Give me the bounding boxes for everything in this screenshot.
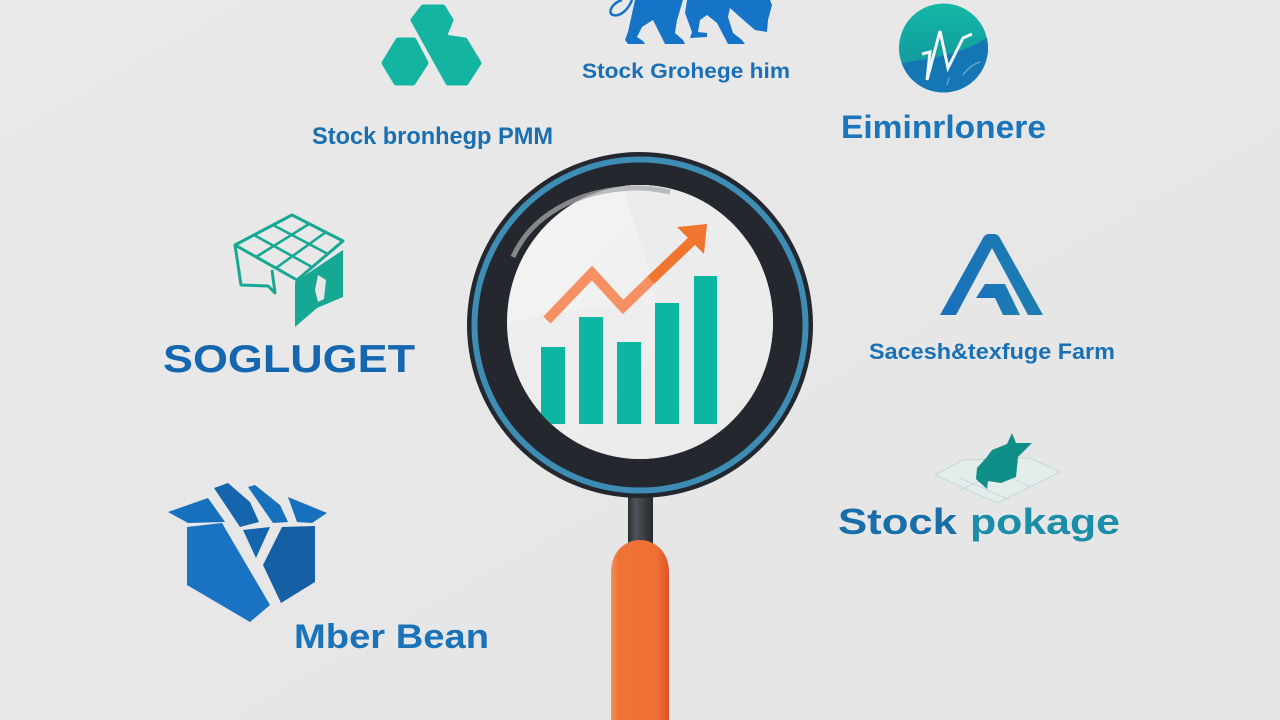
magnifier lens — [507, 185, 780, 470]
magnifier neck — [628, 490, 653, 545]
magnifier orange handle — [611, 540, 669, 720]
label: Sacesh & texfuge Farm: Sacesh&texfuge Farm — [869, 339, 1115, 364]
bar chart — [541, 276, 717, 424]
magnifier rim — [467, 152, 813, 498]
label: Stock bronhegp PMM: Stock bronhegp PMM — [312, 123, 553, 150]
label: Eiminrlonere: Eiminrlonere — [841, 109, 1046, 145]
label: Stock pokage — [838, 501, 1120, 542]
orange trend arrow — [547, 224, 707, 320]
icon: map on a tilted plane — [935, 433, 1060, 503]
icon: letter A logo — [940, 234, 1043, 315]
label: Mber Bean: Mber Bean — [294, 618, 489, 656]
infographic canvas — [164, 0, 1118, 720]
label: Stock pokage: pokage — [970, 501, 1120, 542]
icon: grid box logo — [235, 215, 343, 327]
icon: blue open box logo — [168, 483, 327, 622]
icon: blue lion logo — [610, 0, 772, 44]
label: Stock Grohege him: Stock Grohege him — [582, 60, 790, 83]
label: SOGLUGET: SOGLUGET — [163, 338, 415, 381]
label: Stock pokage: Stock — [838, 501, 958, 542]
icon: magnifying glass — [467, 152, 813, 720]
icon: teal and blue chart disc — [899, 4, 988, 92]
icon: teal hexagon logo — [384, 7, 479, 83]
